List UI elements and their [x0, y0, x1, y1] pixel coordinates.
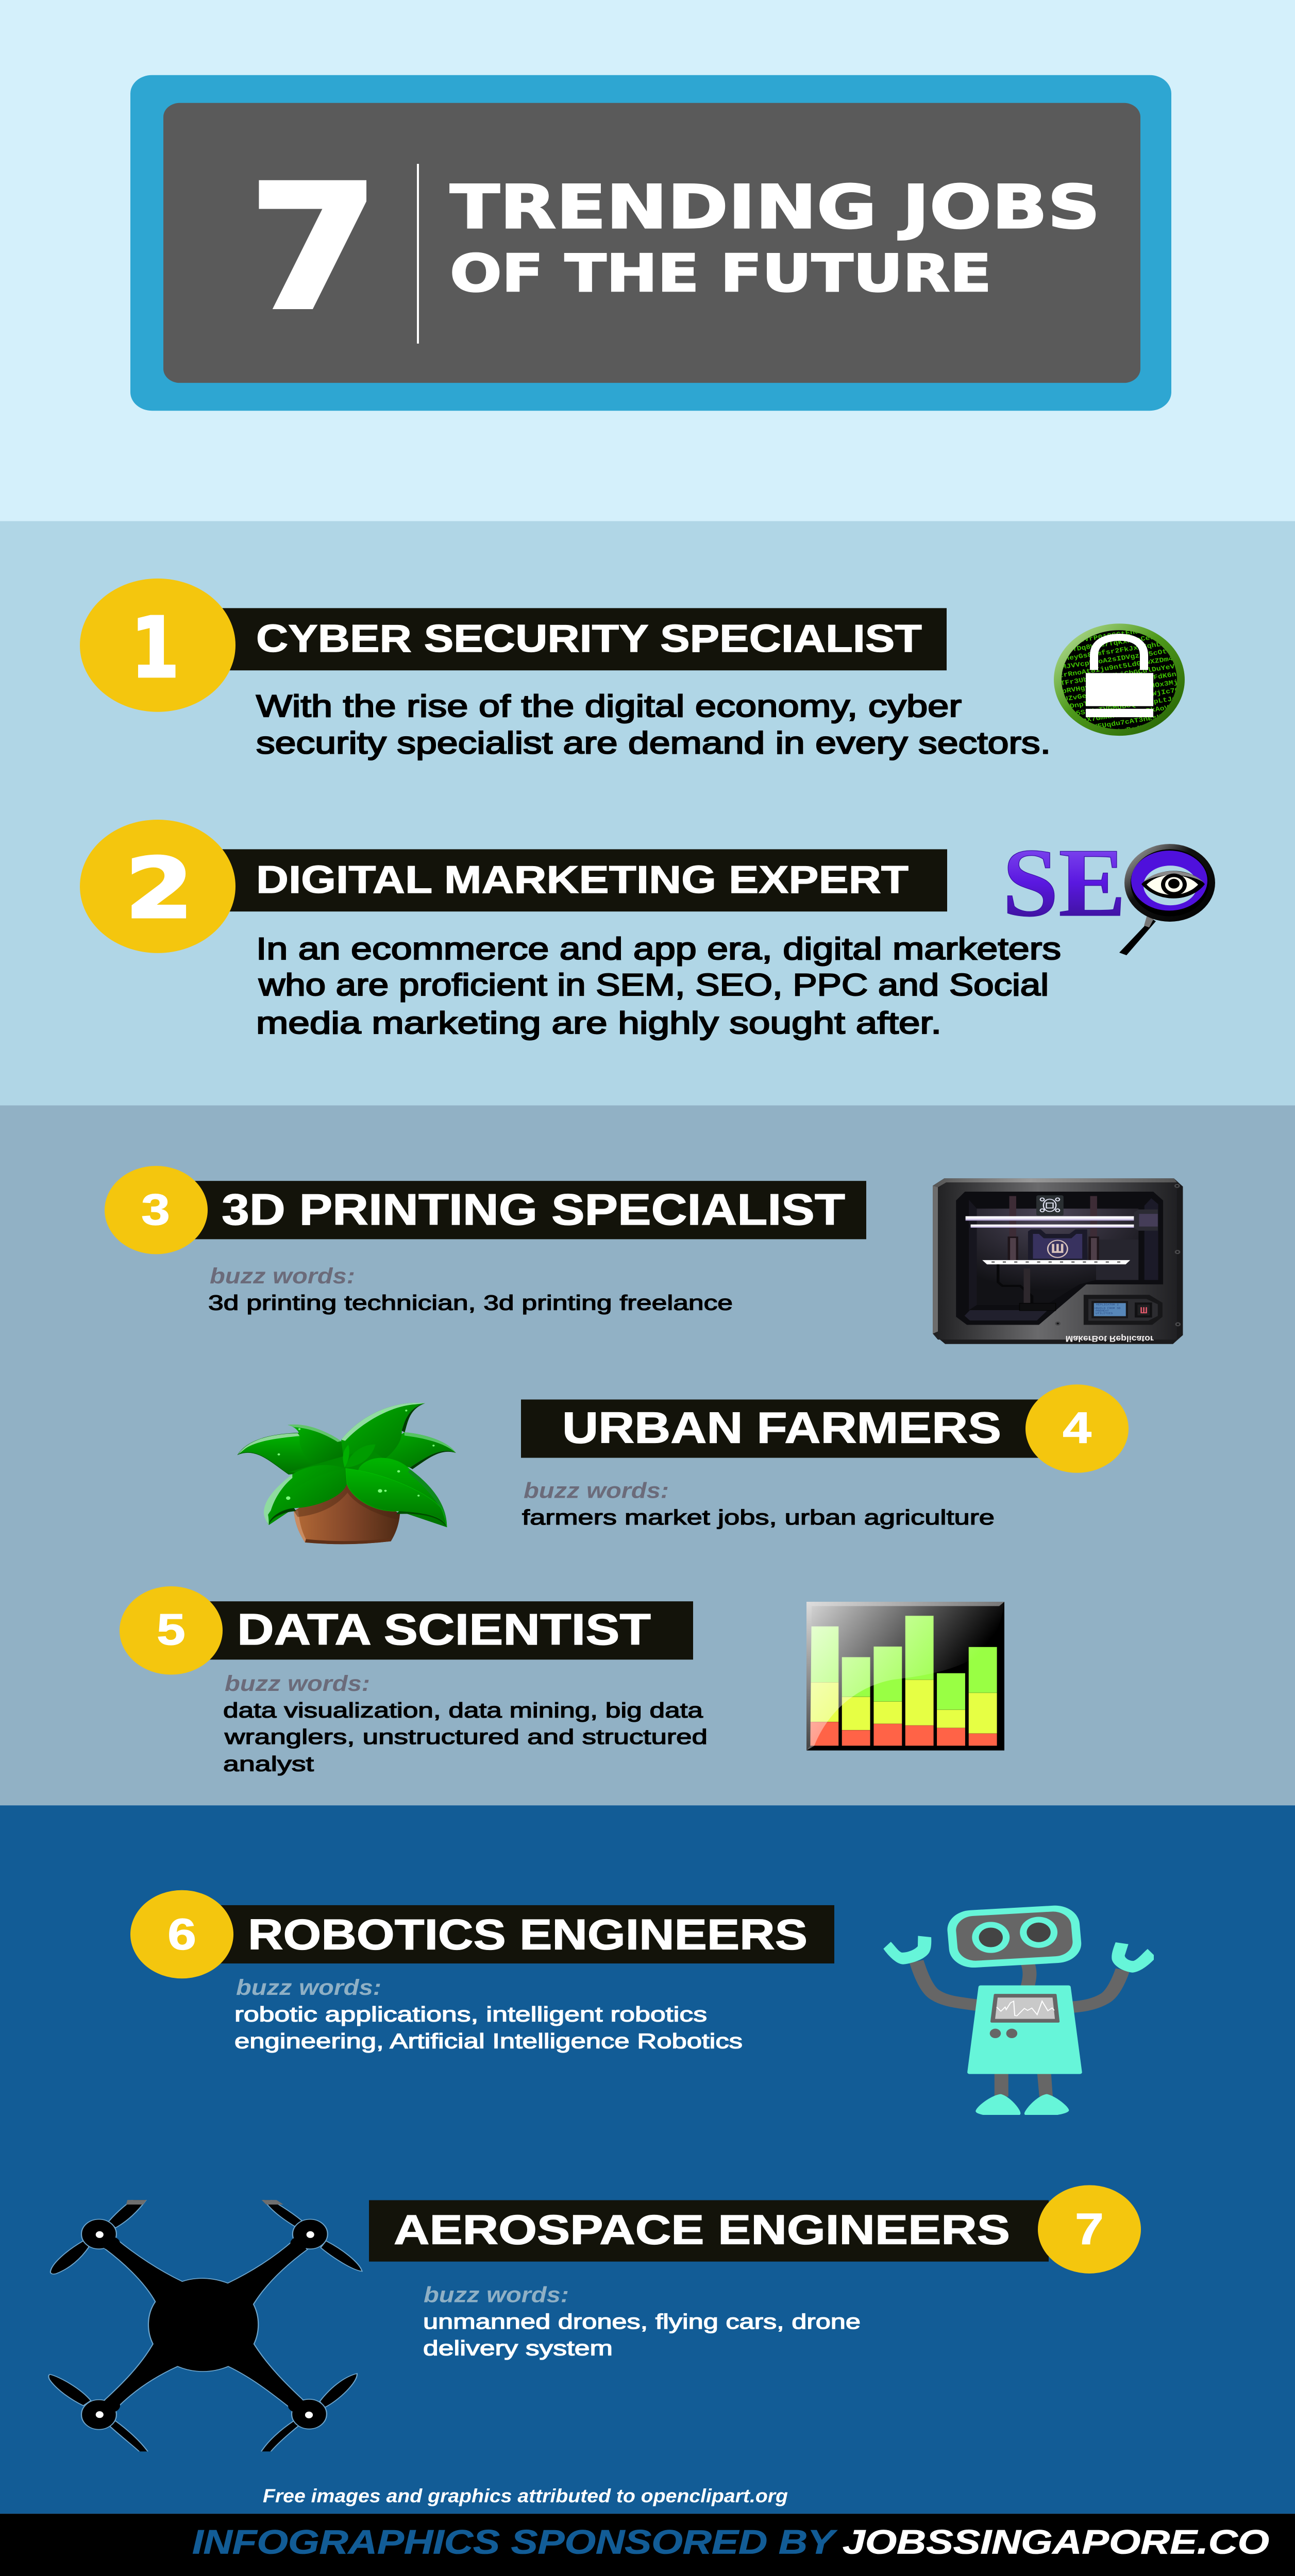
job 4 buzz words: farmers market jobs, urban agriculture [522, 1506, 995, 1529]
title text: OF THE FUTURE [450, 244, 991, 303]
icon: cyber security lock: aYRDnpTfWv2EoKyNdNpfmWjIc7Gl [1055, 686, 1185, 713]
job 5 buzz words: wranglers, unstructured and structured [224, 1725, 708, 1749]
icon: bar chart [806, 1602, 1004, 1751]
job 6 buzz words [234, 1975, 743, 2053]
icon: potted plant [238, 1403, 456, 1544]
job 5 number badge [120, 1586, 223, 1674]
icon: drone [48, 2194, 362, 2453]
job 5 heading bar: DATA SCIENTIST [237, 1605, 651, 1654]
job 2 heading bar [216, 849, 947, 911]
job 2 description: In an ecommerce and app era, digital marketers [256, 931, 1061, 966]
big number 7: 7 [249, 149, 378, 347]
icon: cyber security lock: v7aMJVVcpEaoA2sIDVgzkT5cOtPm [1047, 647, 1177, 673]
job 2 description [256, 931, 1061, 1040]
panel: jobs 3 to 5 [0, 1106, 1295, 1805]
panel: sponsor footer [0, 2514, 1295, 2576]
job 1 description: With the rise of the digital economy, cyber [256, 689, 962, 723]
job 4 heading bar: URBAN FARMERS [562, 1403, 1001, 1452]
job 3 buzz words: buzz words: [210, 1263, 355, 1288]
job 5 buzz words: data visualization, data mining, big data [223, 1699, 703, 1722]
job 7 heading bar: AEROSPACE ENGINEERS [394, 2207, 1010, 2253]
sponsor label: INFOGRAPHICS SPONSORED BY [192, 2523, 838, 2561]
job 1 number badge [80, 579, 236, 712]
job 7 heading bar [369, 2200, 1049, 2262]
icon: cyber security lock: tJIIsbYDq8W6m7TqKxNBaCe5wOfZ [1044, 631, 1173, 658]
icon: cyber security lock: gPWCxkyVFUqdu7cAT3nEsH5jLr9O [1060, 709, 1190, 736]
job 3 buzz words [208, 1263, 733, 1315]
icon: cyber security lock: fCUZvGe9HsL4tBqPiRcHKHOx3Mju [1054, 678, 1183, 705]
panel: jobs 6 and 7 [0, 1805, 1295, 2514]
job 7 buzz words: unmanned drones, flying cars, drone [423, 2310, 861, 2333]
panel: jobs 1 and 2 [0, 521, 1295, 1106]
icon: cyber security lock: xK4Rq01B9sPzLw7eN5tGdYhM2uVc [1041, 615, 1170, 642]
title card outer frame [130, 75, 1171, 411]
title text [450, 172, 1100, 303]
icon: cyber security lock: Hj73YRASoVrP018SGtEndsLy4hQa [1042, 623, 1172, 650]
job 6 buzz words: robotic applications, intelligent robotics [234, 2003, 707, 2026]
icon: 3D printer: MakerBot Replicator [1066, 1334, 1154, 1343]
job 4 number badge: 4 [1063, 1403, 1091, 1452]
icon: 3D printer: PREHEAT [1096, 1310, 1109, 1312]
job 6 number badge [130, 1890, 233, 1978]
icon: cyber security lock: 8WbZHeyGs8Omfsr2FkJx1ZqhLn0R [1046, 639, 1175, 666]
job 7 buzz words: delivery system [423, 2337, 613, 2360]
job 7 buzz words: buzz words: [424, 2282, 569, 2307]
job 5 buzz words: buzz words: [225, 1671, 370, 1696]
job 3 heading bar: 3D PRINTING SPECIALIST [222, 1185, 845, 1234]
image credit: Free images and graphics attributed to openclipart.org [263, 2486, 788, 2506]
sponsor name: JOBSSINGAPORE.CO [843, 2523, 1269, 2561]
icon: robot [883, 1904, 1154, 2116]
job 4 buzz words: buzz words: [524, 1478, 669, 1503]
job 2 heading bar: DIGITAL MARKETING EXPERT [256, 858, 909, 902]
job 1 heading bar [216, 608, 947, 670]
icon: cyber security lock: m190spX7GmRhYcFiUNwDkAoVb6Zq [1058, 701, 1188, 728]
title card inner panel [163, 103, 1140, 383]
job 1 description [256, 689, 1051, 760]
job 7 buzz words [423, 2282, 861, 2360]
job 4 buzz words [522, 1478, 995, 1529]
icon: 3D printer [933, 1178, 1183, 1344]
icon: cyber security lock: sHTFr3Ub2KcQ87LjCbGCulDuYeVa [1051, 662, 1181, 689]
job 3 number badge: 3 [141, 1185, 170, 1234]
icon: SEO magnifier: SE [1002, 828, 1126, 937]
job 1 description: security specialist are demand in every sectors. [256, 725, 1051, 760]
job 2 number badge [80, 820, 236, 953]
job 6 heading bar: ROBOTICS ENGINEERS [248, 1911, 808, 1959]
job 2 description: media marketing are highly sought after. [256, 1006, 941, 1040]
icon: 3D printer: UTILITIES [1096, 1312, 1113, 1315]
icon: cyber security lock: rkyh5SxUzTVGMoB8Qa23gpLtJe1X [1057, 693, 1187, 720]
job 5 buzz words [223, 1671, 708, 1776]
job 7 number badge [1038, 2185, 1141, 2274]
job 5 number badge: 5 [157, 1605, 186, 1654]
job 2 number badge: 2 [125, 840, 193, 937]
icon: 3D printer: >BUILD FROM SD [1094, 1307, 1120, 1310]
icon: SEO magnifier [1002, 828, 1215, 955]
panel: title section [0, 0, 1295, 521]
icon: 3D printer: REPLICATOR 2 [1096, 1303, 1119, 1306]
job 6 buzz words: buzz words: [236, 1975, 381, 1999]
title text: TRENDING JOBS [450, 172, 1100, 242]
icon: cyber security lock: LdN2iMfQe8ZGtyBa4XoKvUWs6RcJ [1062, 717, 1191, 744]
job 3 number badge [105, 1166, 208, 1254]
job 6 number badge: 6 [167, 1909, 196, 1959]
job 1 number badge: 1 [131, 600, 179, 697]
job 5 buzz words: analyst [223, 1752, 314, 1776]
job 7 number badge: 7 [1075, 2204, 1104, 2253]
job 2 description: who are proficient in SEM, SEO, PPC and Social [258, 968, 1049, 1002]
job 3 buzz words: 3d printing technician, 3d printing freelance [208, 1292, 733, 1315]
job 1 heading bar: CYBER SECURITY SPECIALIST [256, 617, 922, 660]
title divider [417, 164, 419, 344]
icon: cyber security lock: QtzrRnoAt8Iju9nt5LdGewXZDm4f [1049, 654, 1179, 681]
job 6 buzz words: engineering, Artificial Intelligence Robotics [234, 2030, 743, 2053]
job 4 number badge [1025, 1384, 1129, 1473]
icon: cyber security lock [1054, 623, 1185, 736]
icon: cyber security lock: wQpRVHgy5NmT1aXoZdG0gRFdK6nS [1052, 670, 1182, 697]
